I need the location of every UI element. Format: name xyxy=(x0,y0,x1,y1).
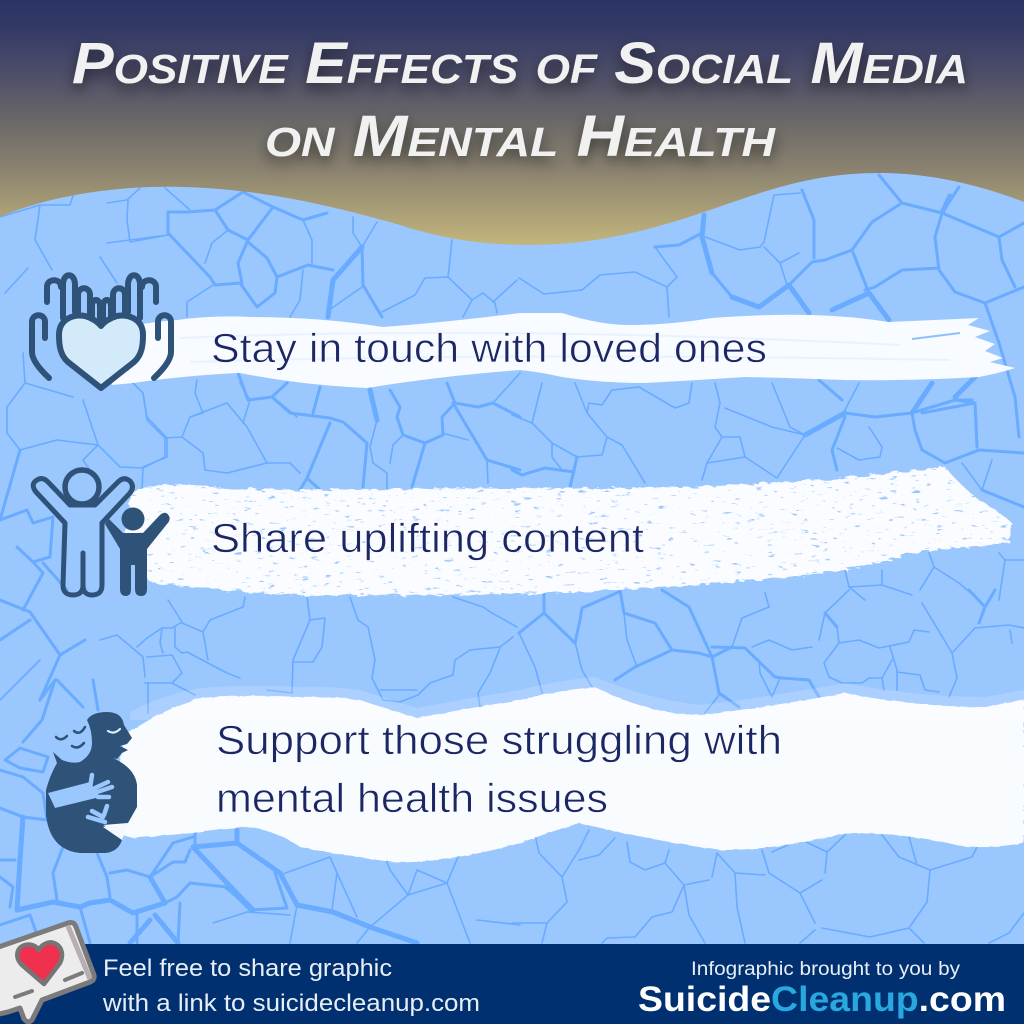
brush stroke 3 xyxy=(105,677,1024,862)
text: support those struggling xyxy=(216,717,782,821)
icon: adult and child with raised arms xyxy=(33,470,170,596)
footer bar xyxy=(0,944,1024,1024)
text: support those struggling: mental health issues xyxy=(216,775,608,821)
text: share note: Feel free to share graphic xyxy=(103,955,392,982)
title: Positive Effects of Social Media xyxy=(72,31,968,96)
brush stroke 2 xyxy=(125,467,1012,595)
header band with wave edge xyxy=(0,0,1024,245)
text: stay in touch: Stay in touch with loved ones xyxy=(211,325,767,371)
text: brand credit xyxy=(638,959,1006,1019)
text: share uplifting content: Share uplifting content xyxy=(211,515,645,561)
text: support those struggling: Support those struggling with xyxy=(216,717,782,763)
title xyxy=(72,31,968,169)
title: on Mental Health xyxy=(265,104,777,169)
brush stroke 1 xyxy=(112,313,1015,388)
icon: hands holding heart xyxy=(32,275,171,388)
icon: speech bubble with heart xyxy=(0,922,94,1022)
icon: two people hugging xyxy=(46,712,137,853)
text: share note: with a link to suicidecleanup.com xyxy=(102,990,480,1017)
text: brand credit: Infographic brought to you by xyxy=(691,959,961,980)
text: share note xyxy=(102,955,480,1017)
text: brand credit: SuicideCleanup .com xyxy=(638,980,1006,1019)
